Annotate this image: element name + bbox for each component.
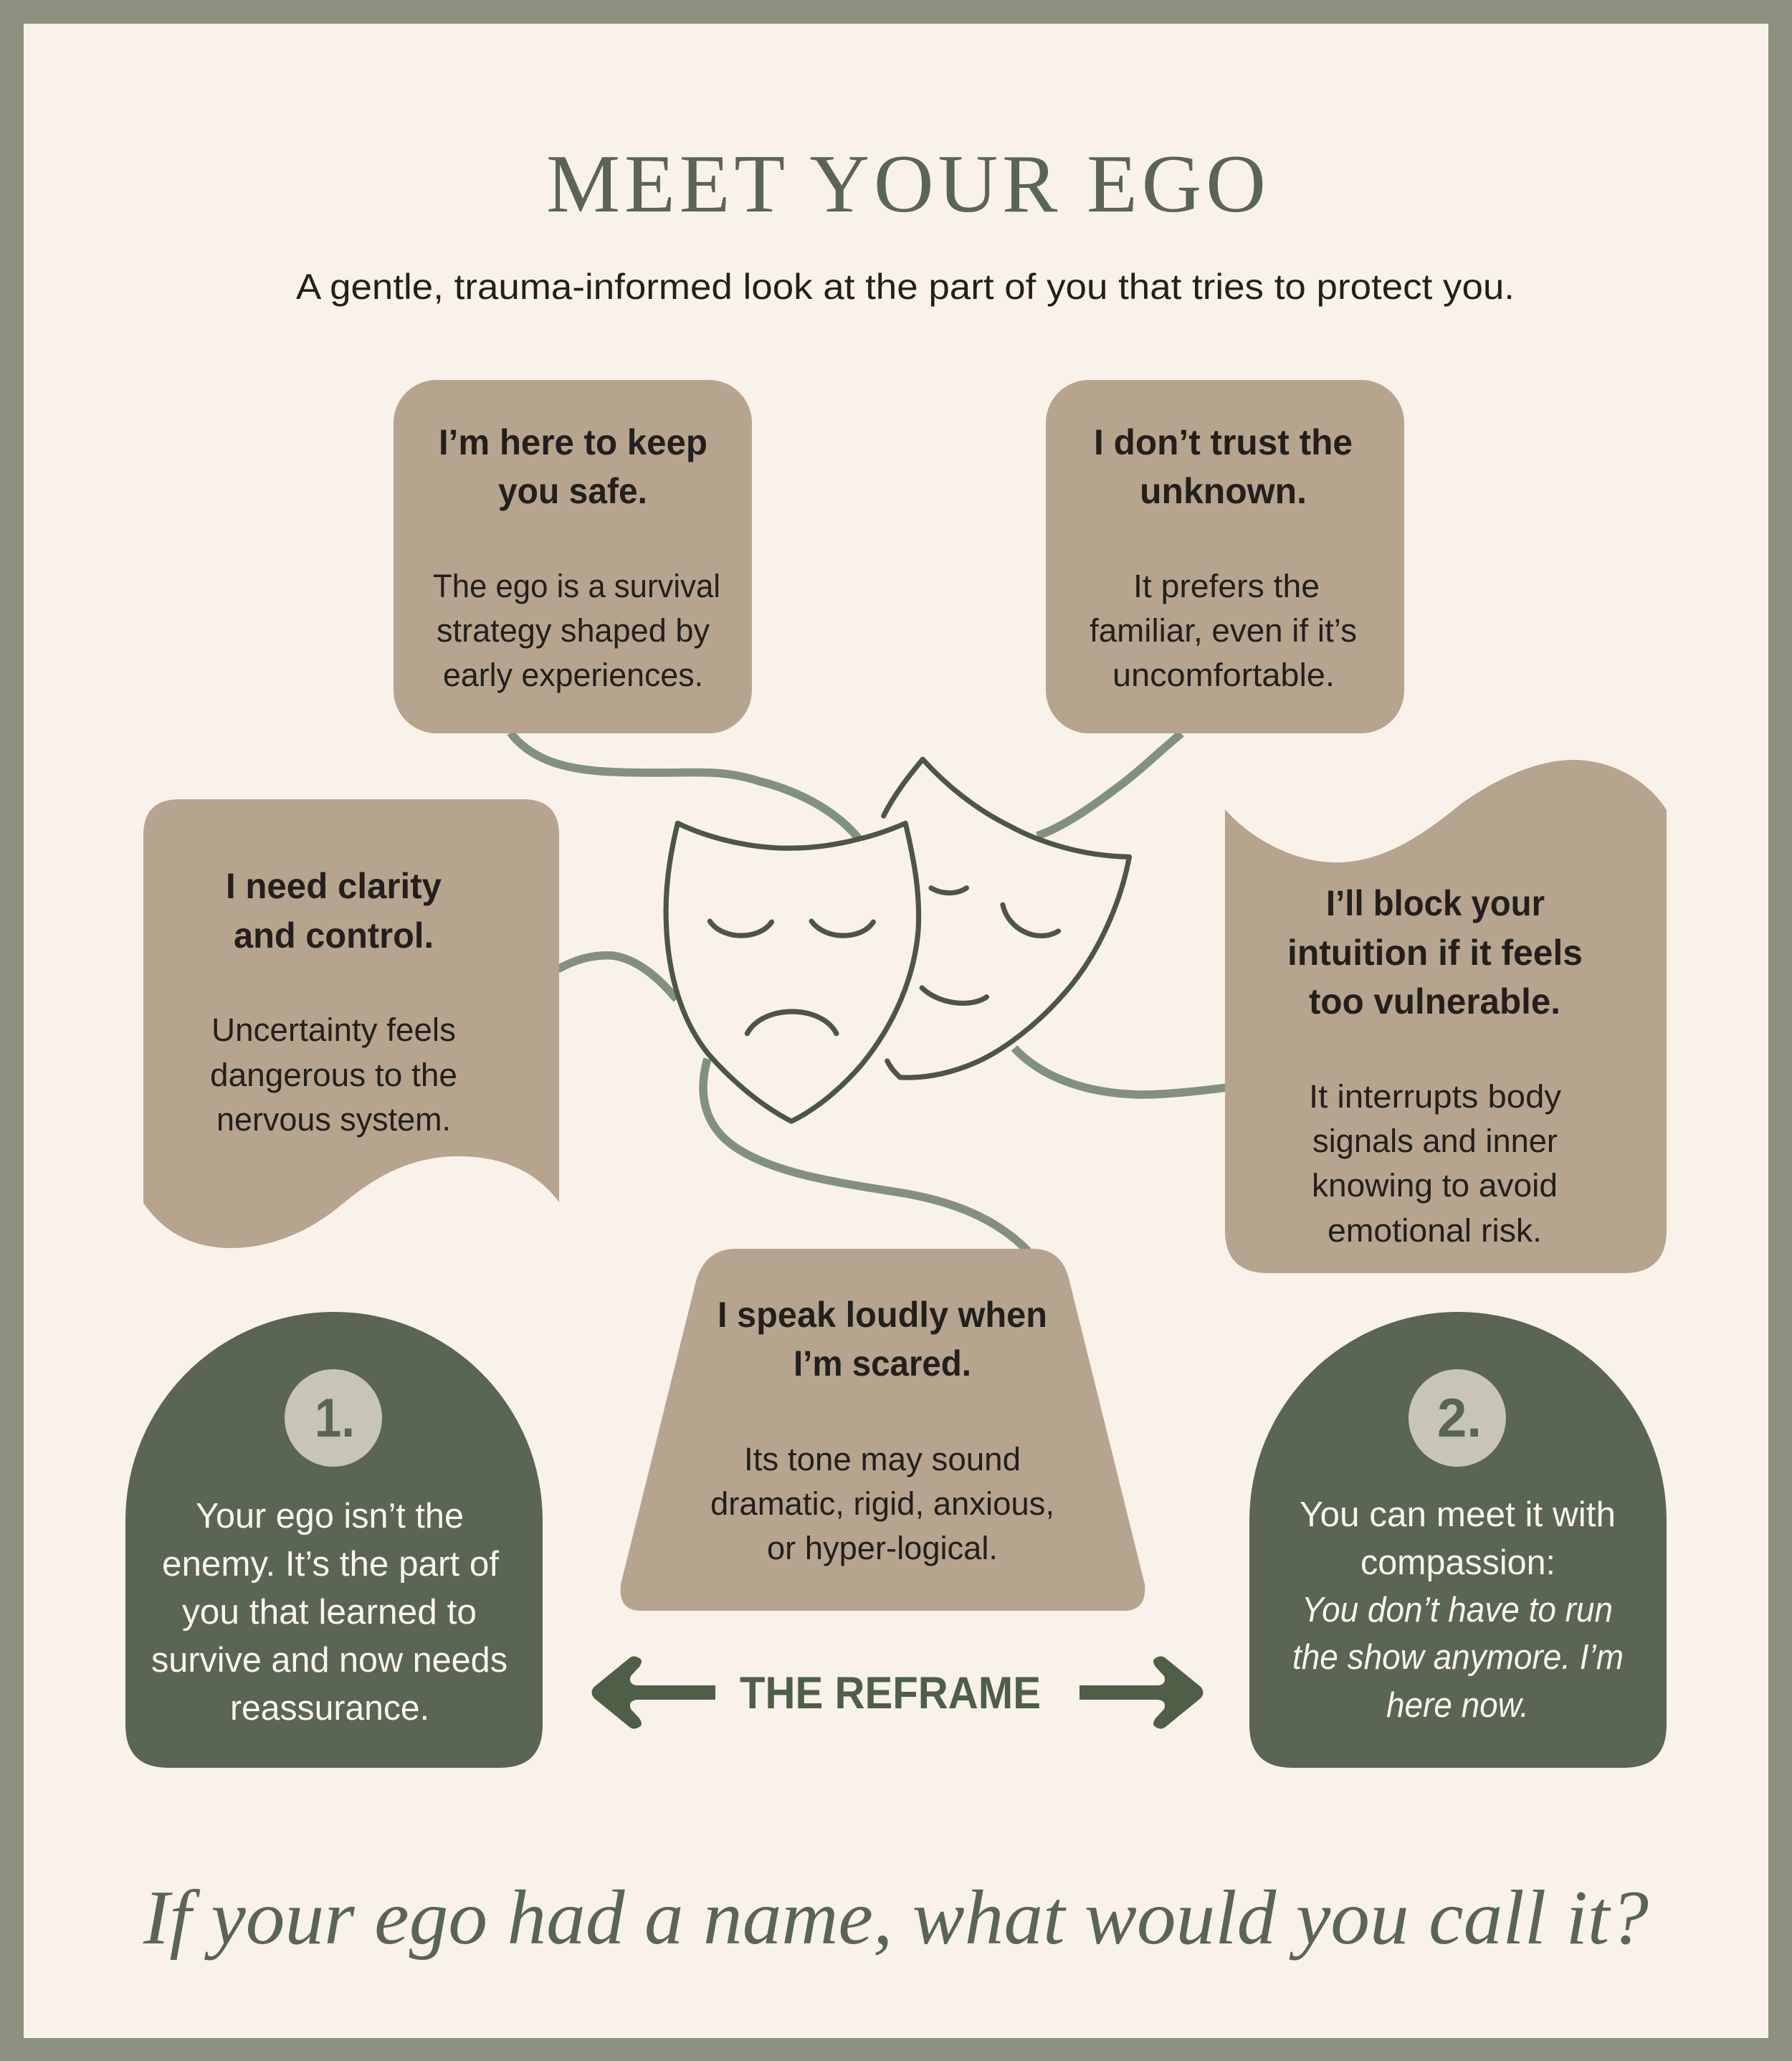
panel: reframe step 1 [125, 1312, 543, 1768]
panel: reframe step 2: compassion: [1360, 1543, 1555, 1582]
closing question: If your ego had a name, what would you call it? [143, 1875, 1649, 1961]
panel: clarity and control: and control. [234, 915, 434, 956]
illustration: theatre masks [666, 759, 1130, 1121]
back mask [884, 759, 1130, 1077]
panel: block your intuition: signals and inner [1312, 1123, 1558, 1159]
front mask [666, 823, 919, 1121]
panel: keep you safe: The ego is a survival [433, 568, 720, 604]
badge: number 1: 1. [315, 1388, 355, 1449]
panel: reframe step 1: you that learned to [182, 1593, 477, 1632]
panel: reframe step 2: the show anymore. I’m [1292, 1638, 1624, 1677]
panel: block your intuition: I’ll block your [1326, 883, 1545, 923]
panel: clarity and control: nervous system. [216, 1101, 451, 1138]
panel: speak loudly: Its tone may sound [744, 1441, 1021, 1477]
panel: reframe step 1: enemy. It’s the part of [162, 1545, 499, 1584]
panel: trust the unknown: unknown. [1140, 471, 1307, 511]
subtitle: A gentle, trauma-informed look at the part of you that tries to protect you. [296, 267, 1515, 307]
panel: block your intuition: It interrupts body [1309, 1078, 1562, 1115]
panel: reframe step 1: survive and now needs [151, 1641, 507, 1680]
panel: block your intuition: emotional risk. [1328, 1212, 1542, 1249]
panel: keep you safe: you safe. [498, 471, 647, 511]
panel: trust the unknown [1046, 380, 1404, 733]
panel: keep you safe [394, 380, 752, 733]
panel: block your intuition [1225, 760, 1667, 1273]
reframe label: THE REFRAME [740, 1668, 1041, 1718]
panel: reframe step 1: Your ego isn’t the [196, 1497, 464, 1536]
badge: number 2 [1409, 1369, 1506, 1467]
panel: trust the unknown: uncomfortable. [1112, 657, 1335, 693]
panel: clarity and control: Uncertainty feels [211, 1012, 456, 1048]
panel: block your intuition: too vulnerable. [1309, 981, 1560, 1022]
panel: trust the unknown: It prefers the [1133, 568, 1320, 604]
arrow: right [1080, 1656, 1203, 1729]
panel: reframe step 2: You don’t have to run [1302, 1591, 1613, 1629]
title: MEET YOUR EGO [546, 138, 1266, 230]
badge: number 1 [285, 1369, 382, 1467]
panel: reframe step 2 [1249, 1312, 1667, 1768]
panel: speak loudly [621, 1249, 1145, 1611]
panel: trust the unknown: I don’t trust the [1094, 422, 1353, 462]
panel: speak loudly: I’m scared. [793, 1343, 971, 1384]
panel: speak loudly: or hyper-logical. [767, 1530, 998, 1566]
panel: clarity and control: I need clarity [226, 866, 442, 906]
panel: speak loudly: I speak loudly when [718, 1295, 1047, 1335]
panel: keep you safe: strategy shaped by [437, 612, 710, 649]
panel: reframe step 2: You can meet it with [1300, 1495, 1616, 1534]
arrow: left [592, 1656, 715, 1729]
panel: keep you safe: early experiences. [443, 657, 703, 693]
panel: clarity and control: dangerous to the [210, 1057, 457, 1093]
panel: keep you safe: I’m here to keep [439, 422, 707, 462]
panel: reframe step 2: here now. [1386, 1686, 1529, 1725]
panel: trust the unknown: familiar, even if it’s [1090, 612, 1357, 649]
panel: reframe step 1: reassurance. [230, 1689, 429, 1728]
badge: number 2: 2. [1437, 1388, 1482, 1449]
panel: block your intuition: intuition if it feels [1287, 933, 1583, 973]
panel: clarity and control [143, 799, 559, 1248]
connector lines [510, 733, 1227, 1251]
panel: block your intuition: knowing to avoid [1312, 1167, 1558, 1204]
panel: speak loudly: dramatic, rigid, anxious, [710, 1485, 1054, 1522]
